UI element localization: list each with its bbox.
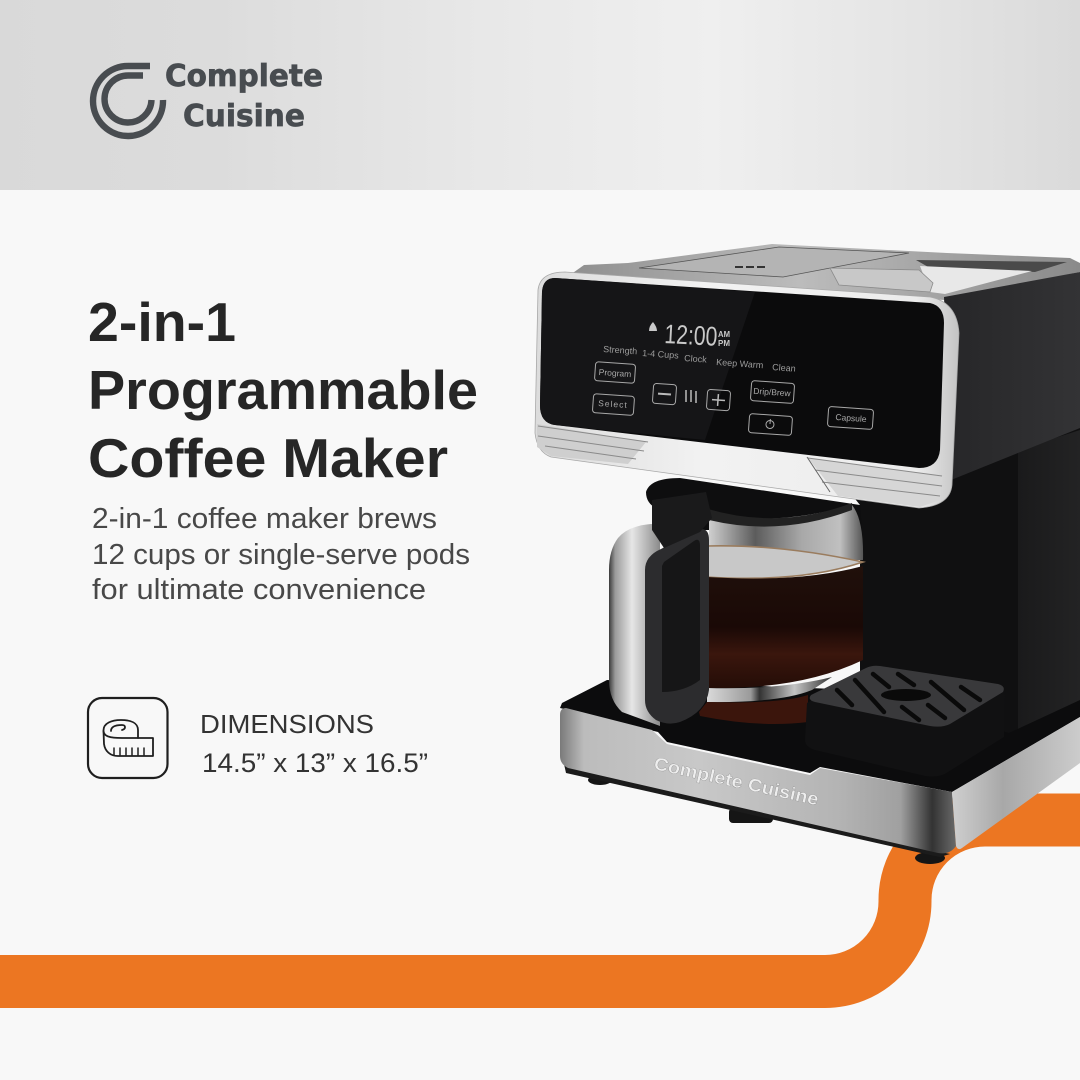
carafe bottom coffee — [699, 695, 808, 724]
base brand text: Complete Cuisine — [652, 753, 820, 809]
panel display: 12:00 — [664, 319, 718, 352]
orange ribbon — [0, 820, 1080, 982]
handle collar — [652, 492, 712, 548]
machine head side — [944, 272, 1080, 480]
button: Program: Program — [598, 367, 632, 379]
logo wordmark — [165, 59, 323, 134]
description text: for ultimate convenience — [92, 574, 426, 606]
carafe lid — [646, 478, 862, 530]
logo: Complete Cuisine — [93, 59, 323, 136]
base: steel side — [952, 717, 1080, 849]
carafe foam — [706, 546, 863, 578]
icon: bell — [649, 322, 657, 331]
description text — [92, 503, 470, 606]
panel display: PM — [718, 338, 730, 348]
button: power — [748, 414, 793, 436]
carafe steel ring — [707, 677, 832, 702]
button: Capsule — [827, 406, 874, 430]
carafe coffee — [707, 566, 863, 688]
button: Select — [592, 394, 635, 415]
panel labels: Clock — [684, 353, 708, 365]
carafe rim — [708, 503, 852, 527]
glass reflection — [540, 278, 755, 440]
panel buttons — [592, 362, 874, 436]
heading: 2-in-1 — [88, 291, 236, 353]
carafe — [609, 478, 863, 726]
button: Capsule: Capsule — [835, 412, 867, 424]
logo mark: double C arcs — [93, 66, 163, 136]
handle black loop — [645, 529, 709, 724]
heading — [88, 291, 478, 489]
drip tray slots — [837, 674, 980, 720]
base: steel front — [560, 708, 956, 853]
drip tray — [805, 666, 1005, 776]
description text: 12 cups or single-serve pods — [92, 539, 470, 571]
button: Select: Select — [598, 398, 628, 410]
panel labels: Clean — [772, 362, 796, 374]
machine tower — [840, 425, 1080, 736]
level bars — [686, 390, 696, 403]
button: Drip/Brew — [750, 381, 795, 404]
panel display: AM — [718, 329, 730, 339]
button: Program — [594, 362, 636, 383]
lid top — [570, 244, 1080, 300]
button: Drip/Brew: Drip/Brew — [753, 386, 792, 398]
control panel glass — [540, 278, 944, 468]
icon: measuring tape — [88, 698, 168, 778]
dimensions text: DIMENSIONS — [200, 709, 374, 739]
button: minus — [652, 383, 677, 405]
carafe glass upper — [709, 505, 863, 560]
logo wordmark: Complete — [165, 59, 323, 94]
handle steel back — [609, 524, 660, 726]
dimensions text: 14.5” x 13” x 16.5” — [202, 748, 428, 778]
panel labels: Keep Warm — [716, 357, 764, 370]
control panel frame — [535, 272, 959, 508]
panel labels: 1-4 Cups — [642, 348, 679, 361]
base: black top — [560, 680, 1080, 792]
lid handle — [830, 268, 933, 292]
panel labels: Strength — [603, 344, 638, 356]
heading: Programmable — [88, 359, 478, 421]
heading: Coffee Maker — [88, 427, 448, 489]
base: under shadow strip — [564, 764, 950, 857]
panel labels — [603, 344, 796, 374]
frame ridged trims — [537, 424, 942, 507]
logo wordmark: Cuisine — [183, 99, 305, 134]
button: plus — [706, 389, 731, 411]
header band: brushed steel — [0, 0, 1080, 190]
base feet — [588, 775, 945, 864]
description text: 2-in-1 coffee maker brews — [92, 503, 437, 535]
dimensions text — [200, 709, 428, 778]
coffee maker product illustration — [535, 244, 1080, 864]
